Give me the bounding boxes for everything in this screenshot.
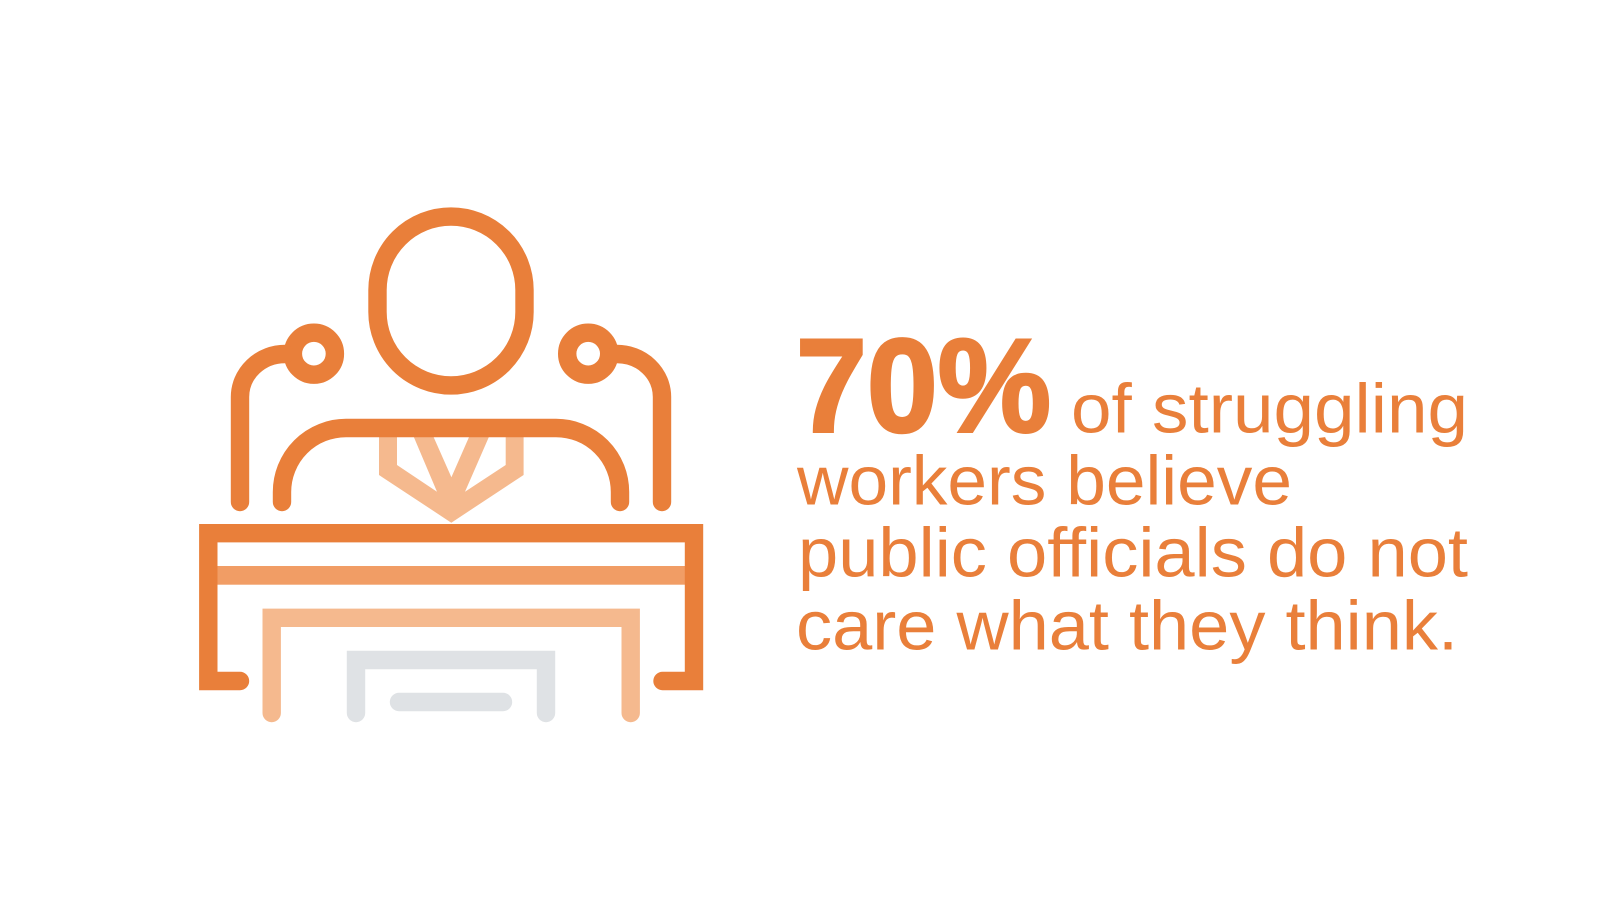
collar and tie — [379, 428, 524, 523]
icon: official at a desk — [208, 217, 694, 713]
shoulders — [282, 428, 620, 502]
line 4: care what they think. — [796, 586, 1458, 664]
statistic text — [796, 312, 1468, 664]
desk top — [208, 533, 694, 681]
left microphone — [240, 333, 335, 502]
right microphone — [567, 333, 662, 502]
desk pill — [399, 693, 503, 711]
desk middle bar — [218, 566, 685, 585]
line 1: of struggling — [1071, 370, 1468, 448]
head — [378, 217, 524, 385]
desk back panel — [356, 660, 546, 713]
line 2: workers believe — [796, 441, 1292, 519]
line 3: public officials do not — [798, 514, 1468, 592]
big number: 70% — [796, 312, 1051, 460]
desk inner panel — [272, 618, 631, 713]
